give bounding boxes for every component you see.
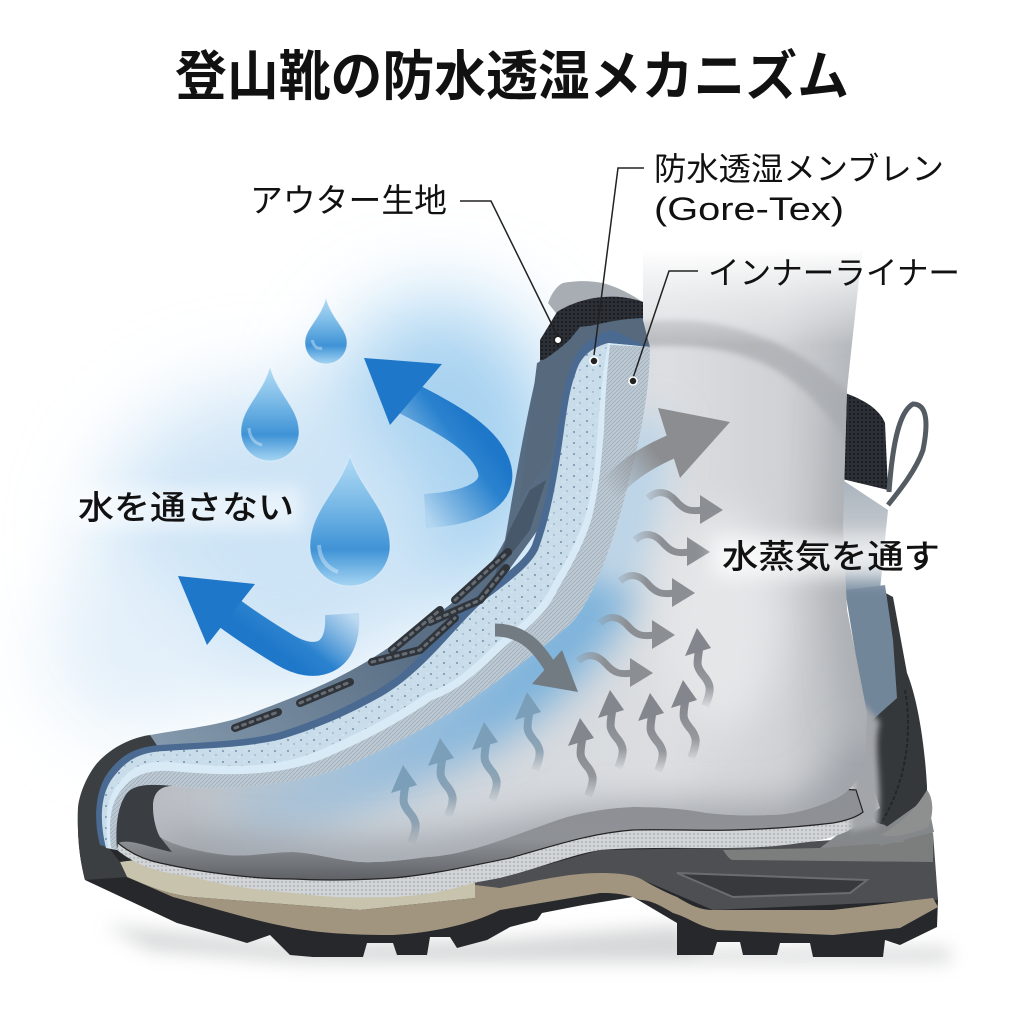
background: blue water glow bbox=[50, 300, 560, 730]
ground shadow bbox=[105, 925, 950, 962]
collar padding bbox=[548, 281, 643, 340]
foam layer bbox=[102, 343, 650, 850]
laces bbox=[235, 552, 508, 728]
toe cavity bbox=[116, 785, 173, 852]
grey arrow: membrane entry bbox=[495, 630, 578, 692]
tan midsole band bbox=[127, 873, 938, 935]
water drops bbox=[241, 298, 390, 586]
blue arrow: lower deflection bbox=[178, 576, 342, 659]
label: vapor passes: 水蒸気を通す bbox=[722, 538, 940, 575]
strap bbox=[495, 480, 546, 575]
leader lines bbox=[460, 168, 698, 378]
vapor arrows flowing right bbox=[578, 493, 723, 687]
back collar seen through leg bbox=[640, 320, 850, 445]
title: 登山靴の防水透湿メカニズム bbox=[175, 47, 849, 107]
label: water blocked: 水を通さない bbox=[78, 489, 294, 526]
foot and leg interior bbox=[140, 240, 880, 880]
heel recess bbox=[677, 873, 867, 897]
membrane strip bbox=[106, 343, 650, 850]
label: outer fabric: アウター生地 bbox=[250, 182, 447, 219]
outsole bbox=[78, 807, 938, 957]
vapor arrows rising bbox=[391, 628, 711, 843]
light heel cup bbox=[723, 828, 933, 862]
label: membrane: 防水透湿メンブレン bbox=[654, 151, 944, 187]
outer fabric bbox=[150, 318, 650, 750]
heel transition shading bbox=[850, 700, 880, 832]
dark midsole heel bbox=[473, 833, 938, 910]
label: membrane: (Gore-Tex) bbox=[654, 191, 844, 227]
heel collar and pull loop bbox=[838, 393, 927, 832]
blue arrow: upper deflection bbox=[364, 358, 495, 511]
grey arrow: vapor exit bbox=[608, 408, 730, 492]
inner liner bbox=[110, 345, 650, 850]
blue stitched band bbox=[96, 330, 650, 850]
leader dots bbox=[554, 336, 637, 385]
boot bbox=[78, 240, 938, 957]
label: inner liner: インナーライナー bbox=[708, 255, 960, 291]
toe rubber rand bbox=[78, 735, 160, 880]
mesh footbed bbox=[107, 770, 880, 898]
insole bbox=[118, 780, 863, 880]
light tan midsole bbox=[120, 858, 475, 910]
